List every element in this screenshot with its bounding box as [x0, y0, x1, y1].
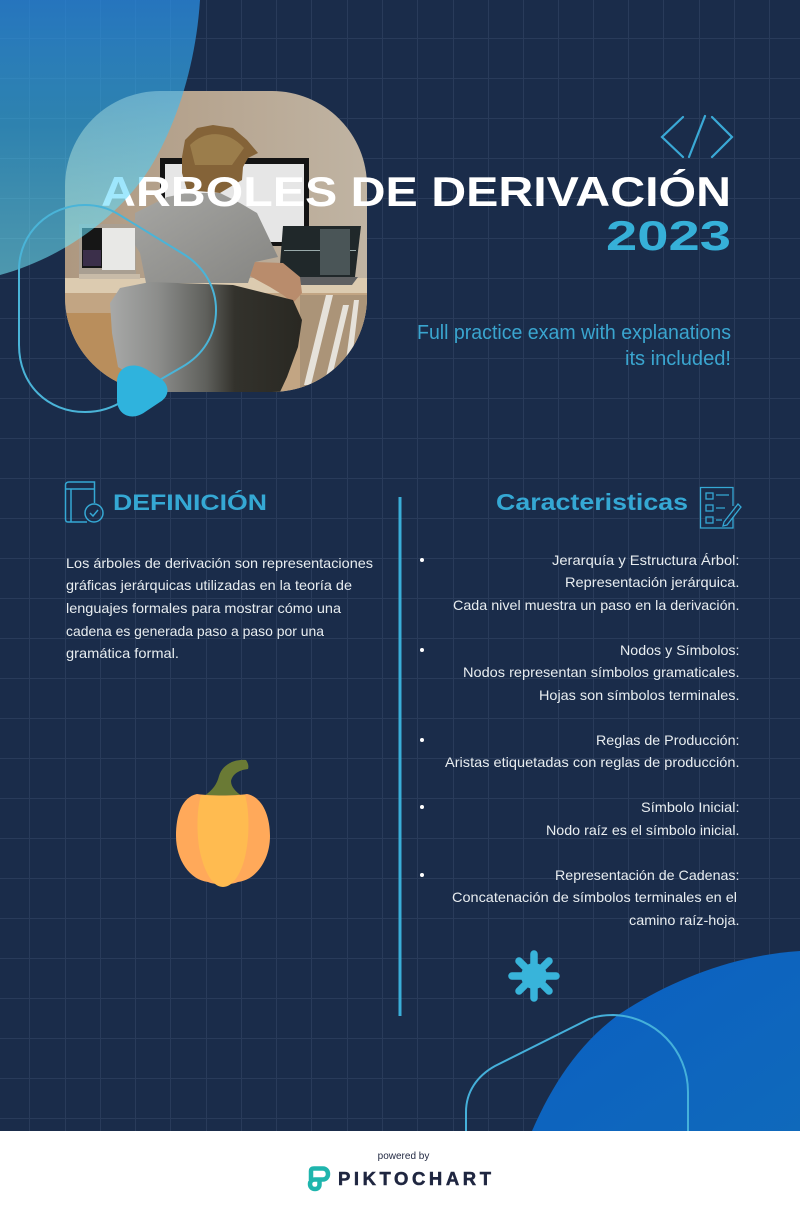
icon: code brackets: [662, 116, 732, 157]
subtitle: [417, 322, 731, 370]
definition text: Los árboles de derivación son representaciones: [66, 555, 373, 571]
definition text: [66, 555, 373, 661]
definition text: gramática formal.: [66, 645, 179, 661]
icon: pumpkin: [176, 760, 270, 887]
definition text: cadena es generada paso a paso por una: [66, 623, 324, 639]
bullet list: Símbolo Inicial:: [641, 799, 740, 815]
title: ARBOLES DE DERIVACIÓN: [101, 167, 731, 215]
photo: person working at a desk with computers: [65, 91, 367, 392]
piktochart logo: PIKTOCHART: [338, 1168, 492, 1189]
bullet list: [420, 552, 740, 928]
bullet list: Concatenación de símbolos terminales en el: [452, 889, 737, 905]
bullet list: Cada nivel muestra un paso en la derivación.: [453, 597, 740, 613]
bullet list: Representación jerárquica.: [565, 574, 740, 590]
subtitle: its included!: [625, 348, 731, 370]
bullet list: Hojas son símbolos terminales.: [539, 687, 740, 703]
bullet list: Reglas de Producción:: [596, 732, 740, 748]
panel: definition: [66, 482, 373, 661]
bullet list: Representación de Cadenas:: [555, 867, 740, 883]
icon: asterisk: [512, 954, 556, 998]
top left blue blob: [0, 0, 200, 275]
icon: checklist with pen: [700, 488, 741, 528]
heading: characteristics: Caracteristicas: [496, 489, 688, 515]
bottom outline shape: [466, 1015, 688, 1131]
divider: [398, 497, 402, 1016]
powered by label: powered by: [378, 1151, 429, 1162]
title year: 2023: [606, 212, 731, 259]
definition text: gráficas jerárquicas utilizadas en la teoría de: [66, 577, 352, 593]
decorative outline shape left: [19, 205, 216, 412]
bullet list: Nodos y Símbolos:: [620, 642, 740, 658]
play shape accent: [117, 365, 168, 416]
bullet list: Jerarquía y Estructura Árbol:: [552, 552, 740, 568]
title: [101, 167, 731, 259]
panel: characteristics: [420, 488, 741, 928]
bullet list: Nodo raíz es el símbolo inicial.: [546, 822, 740, 838]
subtitle: Full practice exam with explanations: [417, 322, 731, 344]
bottom right blue blob: [532, 951, 800, 1131]
bullet list: Nodos representan símbolos gramaticales.: [463, 664, 740, 680]
bullet list: Aristas etiquetadas con reglas de producción.: [445, 754, 740, 770]
heading: definition: DEFINICIÓN: [113, 490, 267, 515]
icon: book with check: [66, 482, 103, 522]
definition text: lenguajes formales para mostrar cómo una: [66, 600, 341, 616]
footer: [0, 1131, 800, 1211]
bullet list: camino raíz-hoja.: [629, 912, 740, 928]
